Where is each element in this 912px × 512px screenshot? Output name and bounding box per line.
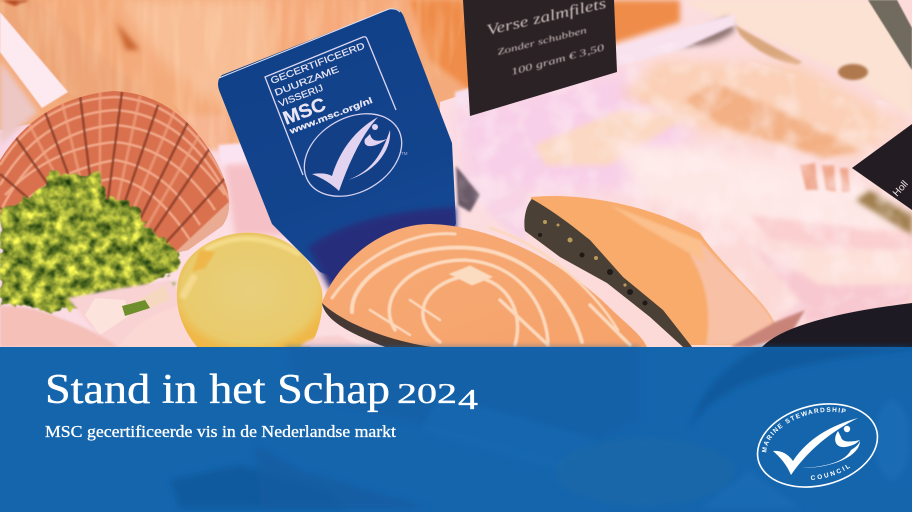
label text on sign: DUURZAME [273, 63, 340, 98]
title: 4 [458, 384, 479, 416]
crushed ice base [0, 0, 912, 347]
label text on sign: GECERTIFICEERD [269, 40, 366, 86]
dark sign, right edge: Holl [891, 179, 911, 199]
label text on sign: VISSERIJ [277, 82, 325, 109]
subtitle: MSC gecertificeerde vis in de Nederlandse markt [45, 422, 396, 441]
label text on sign [269, 40, 374, 136]
tick and fish mark [773, 418, 860, 475]
salmon fillets, top left [0, 0, 680, 150]
label text on sign: www.msc.org/nl [287, 95, 374, 136]
main salmon steak [322, 224, 647, 347]
scallop shell [0, 91, 230, 252]
certified label outline [265, 37, 396, 175]
ice and fish on the right [454, 44, 912, 320]
ghosted photo in banner [170, 347, 912, 508]
dark corner, top right [868, 0, 912, 70]
chalkboard price sign [463, 0, 617, 116]
blue MSC sign [218, 8, 456, 300]
blue MSC sign: TM [401, 151, 408, 156]
chalkboard price sign: Verse zalmfilets [485, 0, 608, 39]
title: Stand in het Schap [45, 367, 390, 413]
chalkboard price sign: Zonder schubben [496, 25, 588, 57]
pale fish, top right [690, 1, 908, 109]
lemon slice [177, 233, 322, 347]
Marine Stewardship Council logo: COUNCIL [810, 464, 850, 480]
label text on sign: MSC [280, 94, 329, 130]
blue title banner [45, 342, 912, 509]
logo oval on sign [304, 113, 402, 197]
pink ice behind shell [225, 165, 290, 235]
small salmon-side ice piece [300, 336, 362, 347]
white display rail [0, 12, 735, 167]
tick and fish mark on sign [312, 117, 390, 191]
title [45, 367, 479, 416]
dark sign, right edge [852, 124, 912, 210]
Marine Stewardship Council logo: MARINE STEWARDSHIP [762, 407, 846, 452]
lettuce garnish [0, 172, 180, 314]
Marine Stewardship Council logo [756, 403, 878, 488]
chalkboard price sign: 100 gram € 3,50 [510, 43, 606, 78]
white fish and flakes, bottom left [0, 280, 206, 347]
background photo: fish counter [0, 0, 912, 347]
brown fish fins, top right [675, 17, 868, 80]
dark bowl, bottom right [762, 303, 912, 347]
title: 202 [397, 378, 457, 410]
second salmon steak [524, 196, 805, 347]
